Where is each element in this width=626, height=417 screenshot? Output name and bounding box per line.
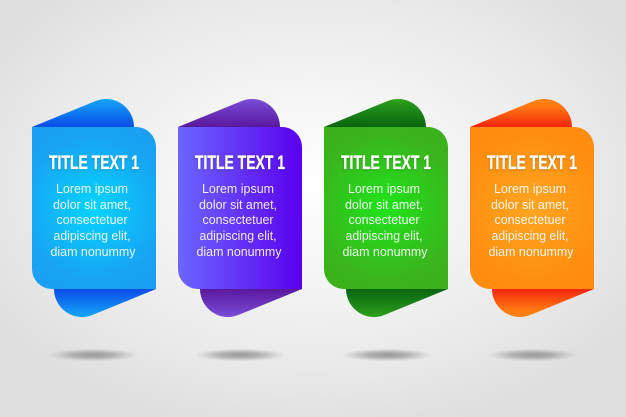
purple card bbox=[178, 127, 302, 289]
blue heading: TITLE TEXT 1 bbox=[49, 153, 139, 174]
blue top flap bbox=[32, 99, 134, 127]
green body text: Lorem ipsum bbox=[348, 181, 420, 196]
purple heading: TITLE TEXT 1 bbox=[195, 153, 285, 174]
green card bbox=[324, 127, 448, 289]
orange bottom flap bbox=[492, 289, 594, 317]
purple top flap bbox=[178, 99, 280, 127]
panel: blue banner bbox=[32, 99, 156, 317]
purple body text: consectetuer bbox=[202, 212, 274, 227]
orange heading: TITLE TEXT 1 bbox=[487, 153, 577, 174]
blue bottom flap bbox=[54, 289, 156, 317]
blue floor shadow bbox=[47, 348, 139, 362]
blue body text: dolor sit amet, bbox=[53, 197, 131, 212]
green floor shadow bbox=[341, 348, 433, 362]
orange body text: Lorem ipsum bbox=[494, 181, 566, 196]
blue body text: Lorem ipsum bbox=[56, 181, 128, 196]
blue body text: diam nonummy bbox=[50, 244, 136, 259]
green body text: diam nonummy bbox=[342, 244, 428, 259]
orange body text: adipiscing elit, bbox=[492, 228, 568, 243]
blue body text: adipiscing elit, bbox=[54, 228, 130, 243]
green body text: adipiscing elit, bbox=[346, 228, 422, 243]
blue body text: consectetuer bbox=[56, 212, 128, 227]
panel: orange banner bbox=[470, 99, 594, 317]
panel: green banner bbox=[324, 99, 448, 317]
green body text bbox=[342, 181, 428, 259]
green top flap bbox=[324, 99, 426, 127]
panel: purple banner bbox=[178, 99, 302, 317]
purple floor shadow bbox=[194, 348, 286, 362]
green body text: consectetuer bbox=[348, 212, 420, 227]
blue body text bbox=[50, 181, 136, 259]
green body text: dolor sit amet, bbox=[345, 197, 423, 212]
orange body text: diam nonummy bbox=[488, 244, 574, 259]
orange body text: consectetuer bbox=[494, 212, 566, 227]
purple body text: adipiscing elit, bbox=[200, 228, 276, 243]
orange card bbox=[470, 127, 594, 289]
orange body text: dolor sit amet, bbox=[491, 197, 569, 212]
purple body text: diam nonummy bbox=[196, 244, 282, 259]
purple body text bbox=[196, 181, 282, 259]
purple body text: Lorem ipsum bbox=[202, 181, 274, 196]
purple body text: dolor sit amet, bbox=[199, 197, 277, 212]
orange top flap bbox=[470, 99, 572, 127]
orange floor shadow bbox=[487, 348, 579, 362]
blue card bbox=[32, 127, 156, 289]
orange body text bbox=[488, 181, 574, 259]
purple bottom flap bbox=[200, 289, 302, 317]
green heading: TITLE TEXT 1 bbox=[341, 153, 431, 174]
green bottom flap bbox=[346, 289, 448, 317]
